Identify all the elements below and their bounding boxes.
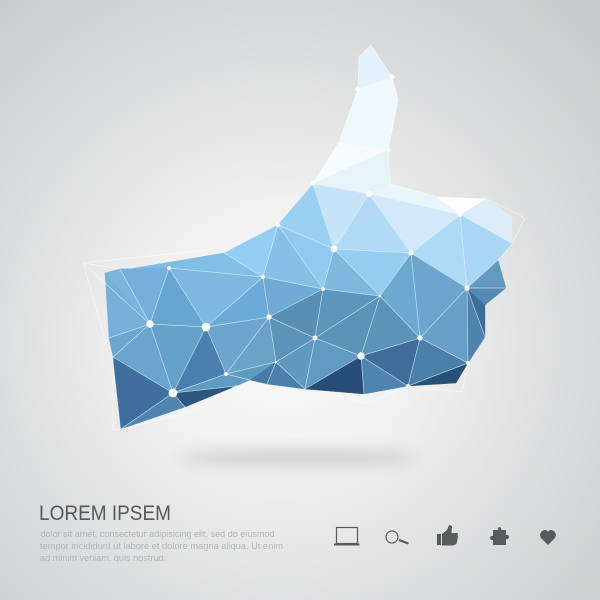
thumb facets xyxy=(313,45,512,244)
mesh lines xyxy=(109,184,506,429)
icon: heart xyxy=(540,530,556,545)
body text: ad minim veniam, quis nostrud. xyxy=(40,553,166,563)
low-poly thumbs up illustration xyxy=(83,45,525,430)
icon: puzzle piece xyxy=(490,527,509,545)
icon: magnifier xyxy=(386,531,408,544)
body text: dolor sit amet, consectetur adipisicing elit, sed do eiusmod xyxy=(40,529,274,539)
title: LOREM IPSEM xyxy=(39,502,171,525)
ground shadow xyxy=(178,452,418,464)
outer wireframe xyxy=(83,45,525,430)
body text: tempor incididunt ut labore et dolore magna aliqua. Ut enim xyxy=(40,541,283,551)
node dots xyxy=(146,74,470,397)
icon: thumbs up xyxy=(437,525,458,546)
hand facets xyxy=(105,184,512,429)
icon: laptop xyxy=(334,528,360,544)
body text xyxy=(40,529,283,563)
